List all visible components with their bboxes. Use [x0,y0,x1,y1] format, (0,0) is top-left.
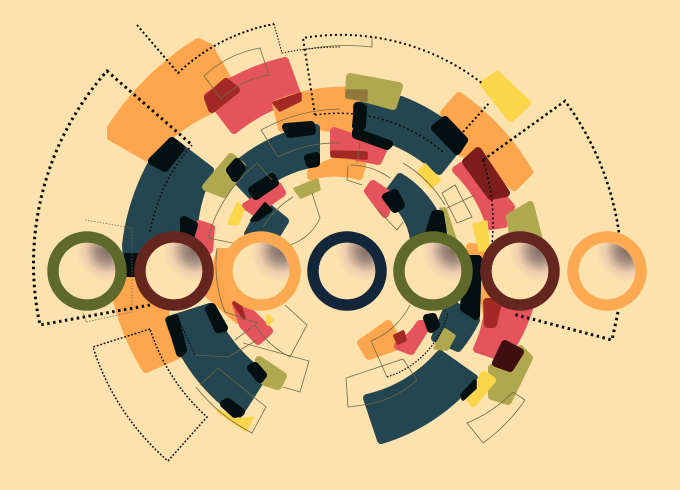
orange arc: lower right [483,272,498,320]
frame: top left [204,48,269,99]
red arc: lower inner right [398,324,428,351]
orange arc: top left [111,42,234,158]
frame: inner centre [263,193,320,245]
frame: centre right [378,163,445,230]
red block: by second ring [199,224,211,250]
orange arc: top right [444,96,529,187]
orange arc: by third ring [208,252,238,320]
overlap: black upper inner left [230,162,242,178]
red block: inner right [368,184,392,214]
orange arc: top centre [276,91,366,130]
overlap: dark red lower right [487,302,498,324]
dotted frame: lower left [93,329,207,461]
yellow block: by sixth ring [474,222,488,250]
orange arc: lower centre [361,324,400,356]
heavy dotted outlines [34,24,619,461]
yellow sliver: lower centre [268,316,272,324]
coloured arc segments [111,42,539,440]
teal arc: lower right large [367,354,474,440]
overlap: dark red lower inner [395,332,405,343]
overlap: black lower left top [209,307,224,329]
overlap: black inner strip [252,177,275,196]
overlap: black upper right [435,120,464,151]
red arc: lower right [477,302,531,358]
dotted frame: top left [137,24,274,73]
red arc: centre [334,131,384,161]
teal arc: lower left [169,307,264,414]
overlap: maroon right [466,151,506,196]
overlap: black upper centre right horizontal [356,132,389,146]
overlap: black lower inner [427,317,436,329]
frame: right block [442,185,475,223]
orange arc: centre [311,159,362,176]
overlap: black lower left side [170,318,183,353]
frame: lower centre right [346,359,417,407]
olive block: left [206,157,242,194]
dotted arc: right inner [483,160,493,243]
olive block: top centre [349,77,399,106]
ring: maroon 2 [486,237,554,305]
yellow block: inner left [229,204,243,224]
teal arc: inner right [386,177,444,240]
ring: maroon 1 [140,237,208,305]
ring: orange 2 [573,237,641,305]
overlap: black lower left right [251,366,263,379]
olive block: lower inner [435,330,454,349]
dotted frame: top left end [274,24,340,53]
red arc: right [456,166,511,226]
frame: upper centre [261,109,340,157]
olive block: lower left [259,360,283,386]
frame: lower teal [196,368,266,433]
overlap: black inner right end [427,214,444,240]
ring: navy [313,237,381,305]
red arc: top [208,61,298,130]
teal arc: right inner [435,302,476,348]
frame: lower centre [243,343,309,392]
thin outlined frames [83,37,525,443]
frame: lower left of third ring [216,248,257,340]
yellow block: top right [484,75,527,118]
dotted line: top right [463,102,490,132]
orange arc: top of sixth ring [470,247,482,256]
overlap: black small inner [252,204,271,220]
overlap: dark red top left [208,82,236,109]
overlap: black lower left bottom [224,402,241,414]
red block: inner left [246,186,282,212]
ring: orange 1 [227,237,295,305]
dotted frame: lower inner right [387,312,448,377]
teal arc: left [126,141,210,260]
frame: centre [347,143,390,185]
overlap: black right of fifth ring [464,259,478,316]
teal arc: upper left inner [229,128,316,196]
frame: inner arcs [208,163,272,243]
overlap: black lower right [462,381,475,399]
yellow arc: lower left [218,411,252,430]
rings [53,237,641,305]
olive block: centre left [295,180,319,197]
frame: lower teal upper [195,340,257,357]
frame: left of first ring [83,220,132,322]
ring: olive 1 [53,237,121,305]
overlap: black upper centre [308,156,316,164]
frame: lower right [467,392,525,443]
dotted arc: under top [315,113,443,152]
yellow block: lower right [470,375,492,403]
dotted arc: left return [150,145,192,233]
overlap: dark red centre [332,152,366,158]
overlap: black top centre [286,125,312,134]
olive arc: inner right [441,209,456,242]
dotted frame: lower left inner [178,318,195,355]
frame: lower centre left [255,305,307,357]
overlap: black under first ring gap [124,253,138,277]
olive block: right [510,205,539,240]
dotted frame: top arc [303,35,483,115]
dotted frame: right bottom [513,312,618,340]
overlap: black inner right block [386,193,401,209]
yellow block: inner right [419,165,439,187]
overlap: brown olive orange [347,91,366,100]
red arc: lower centre left [236,304,269,341]
ring: olive 2 [399,237,467,305]
overlap: dark red top centre [274,94,300,110]
overlap: black left [152,141,181,168]
teal arc: inner left [248,204,285,234]
overlap: dark brown lower right [496,344,520,368]
orange arc: lower left [116,272,178,369]
teal arc: upper right [357,100,464,171]
frame: small top [302,37,372,50]
dotted frame: right [483,101,619,233]
olive block: lower right [492,349,529,401]
overlap: black by second ring [184,220,194,238]
frame: lower inner right [371,305,410,377]
overlap: dark red lower left [234,303,244,318]
dotted frame: far left [34,71,192,325]
overlap: black upper centre right vertical [356,106,363,126]
